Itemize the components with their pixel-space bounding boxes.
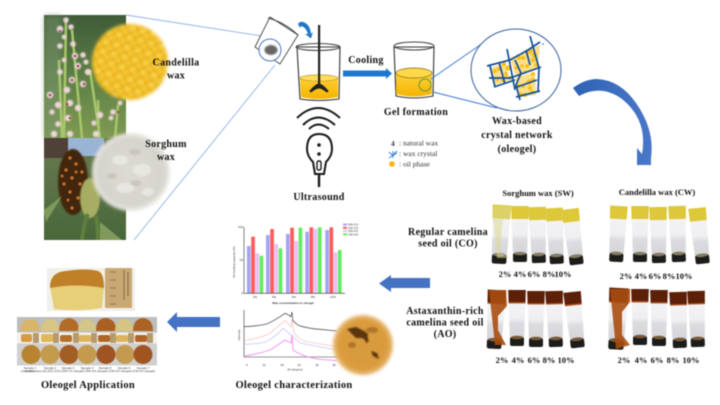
label: gel formation: Gel formation <box>384 107 448 118</box>
captions: cake samples: Sample 1 <box>24 366 37 370</box>
circle: wax-based crystal network <box>471 29 561 111</box>
label: astaxanthin-rich camelina seed oil: (AO) <box>434 329 456 340</box>
percent labels: candelilla astaxanthin: 4% <box>635 355 647 365</box>
percent labels: candelilla astaxanthin: 8% <box>667 355 679 365</box>
percent labels: candelilla astaxanthin: 10% <box>682 355 700 365</box>
percent labels: candelilla astaxanthin <box>618 355 700 365</box>
label: cooling: Cooling <box>348 55 384 66</box>
captions: cake samples: (butter) <box>25 369 35 373</box>
percent labels: candelilla regular: 8% <box>663 271 675 281</box>
heading: candelilla wax: Candelilla wax (CW) <box>619 187 695 197</box>
icon: gel formation beaker <box>394 42 434 98</box>
zoom guide lines from waxes to beaker <box>126 15 275 240</box>
line chart: XRD intensity: 24 <box>297 363 301 367</box>
bar chart: oil-holding capacity: CW-CO <box>348 226 359 230</box>
label: candelilla wax: wax <box>167 70 185 82</box>
percent labels: candelilla regular: 6% <box>649 271 661 281</box>
arrow: pour into beaker <box>298 22 313 38</box>
arrow: characterization to application <box>167 312 220 332</box>
percent labels: sorghum regular: 6% <box>528 269 540 279</box>
label: oleogel characterization: Oleogel characterization <box>235 380 353 391</box>
wax sample: candelilla pellets <box>92 24 168 100</box>
bar chart: oil-holding capacity: 100 <box>238 225 243 229</box>
captions: cake samples: (camelina seed oil) (AO) (CO) (SW-CO oleogel) (SW-AO oleogel) (CW-CO oleogel) (CW-AO oleogel) <box>21 369 155 373</box>
percent labels: sorghum regular <box>499 269 572 279</box>
label: candelilla wax: Candelilla <box>153 58 199 68</box>
captions: cake samples: Sample 6 <box>118 366 131 370</box>
percent labels: candelilla regular: 4% <box>635 271 647 281</box>
photo: baked cake with ruler <box>47 268 135 311</box>
label: sorghum wax: wax <box>157 152 175 163</box>
label: wax-based crystal network: Wax-based <box>492 116 542 127</box>
icon: tilted beaker with wax <box>255 17 298 64</box>
bar chart: oil-holding capacity: SW-CO <box>348 222 359 226</box>
label: sorghum wax: Sorghum <box>145 139 187 150</box>
tubes: candelilla wax in astaxanthin oil <box>606 287 707 350</box>
line chart: XRD intensity: 18 <box>280 363 284 367</box>
legend: natural wax, wax crystal, oil phase <box>389 138 438 168</box>
photo: candelilla plant <box>44 15 126 138</box>
legend: natural wax, wax crystal, oil phase: 4 <box>391 139 395 148</box>
tubes: sorghum wax in astaxanthin oil <box>485 290 587 349</box>
bar chart: oil-holding capacity: SW-AO <box>348 229 359 233</box>
line chart: XRD intensity: 36 <box>332 363 336 367</box>
percent labels: candelilla astaxanthin: 2% <box>618 355 630 365</box>
line chart: XRD intensity: 6 <box>246 363 248 367</box>
legend: natural wax, wax crystal, oil phase: : wax crystal <box>399 149 437 158</box>
bar chart: oil-holding capacity: 4% <box>272 295 276 299</box>
legend: natural wax, wax crystal, oil phase: : natural wax <box>399 138 438 148</box>
tubes: candelilla wax in regular oil <box>607 206 712 265</box>
percent labels: sorghum astaxanthin: 6% <box>528 355 540 365</box>
percent labels: sorghum regular: 2% <box>499 269 511 279</box>
label: oleogel application: Oleogel Application <box>41 380 135 391</box>
icon: ultrasound probe <box>297 108 340 187</box>
photo: oleogel micrograph <box>333 315 393 375</box>
line chart: XRD intensity: 12 <box>262 363 266 367</box>
bar chart: oil-holding capacity: Wax concentration in oleogel <box>272 301 314 305</box>
label: astaxanthin-rich camelina seed oil: camelina seed oil <box>406 318 484 328</box>
bar chart: oil-holding capacity: 8% <box>311 295 315 299</box>
captions: cake samples: Sample 7 <box>137 366 150 370</box>
label: wax-based crystal network: crystal network <box>481 130 553 141</box>
line chart: XRD intensity: 2θ (degree) <box>287 368 303 372</box>
percent labels: sorghum regular: 8% <box>543 269 555 279</box>
photo strip: cake cross-sections <box>17 317 157 332</box>
percent labels: sorghum astaxanthin <box>496 355 574 365</box>
percent labels: candelilla regular: 2% <box>620 271 632 281</box>
percent labels: sorghum astaxanthin: 8% <box>543 355 555 365</box>
line chart: XRD intensity <box>237 310 345 372</box>
captions: cake samples <box>21 366 155 373</box>
captions: cake samples: Sample 4 <box>81 366 94 370</box>
percent labels: sorghum astaxanthin: 2% <box>496 355 508 365</box>
photo strip: side views with ruler <box>17 332 157 344</box>
icon: main beaker with stirrer <box>296 25 340 100</box>
bar chart: oil-holding capacity: 0 <box>241 291 243 295</box>
percent labels: candelilla regular <box>620 271 692 281</box>
percent labels: sorghum regular: 10% <box>554 269 572 279</box>
captions: cake samples: Sample 2 <box>44 366 57 370</box>
label: regular camelina seed oil: seed oil (CO) <box>418 238 478 250</box>
bar chart: oil-holding capacity: 6% <box>292 295 296 299</box>
line chart: XRD intensity: 30 <box>315 363 319 367</box>
captions: cake samples: Sample 3 <box>62 366 75 370</box>
percent labels: candelilla astaxanthin: 6% <box>651 355 663 365</box>
line chart: XRD intensity: Intensity <box>237 329 241 341</box>
tubes: sorghum wax in regular oil <box>490 205 586 266</box>
label: regular camelina seed oil: Regular camelina <box>408 227 488 238</box>
zoom lines from gel to network <box>431 43 497 108</box>
legend: natural wax, wax crystal, oil phase: : oil phase <box>399 160 430 168</box>
percent labels: sorghum astaxanthin: 4% <box>512 355 524 365</box>
label: ultrasound: Ultrasound <box>293 192 345 203</box>
heading: sorghum wax: Sorghum wax (SW) <box>502 188 574 198</box>
arrow: samples to characterization <box>379 275 430 292</box>
label: astaxanthin-rich camelina seed oil: Astaxanthin-rich <box>406 306 484 317</box>
photo: sorghum plant <box>44 138 126 240</box>
percent labels: candelilla regular: 10% <box>676 271 692 281</box>
bar chart: oil-holding capacity: 10% <box>330 295 336 299</box>
bar chart: oil-holding capacity: 50 <box>240 258 243 262</box>
wax sample: sorghum powder <box>92 133 170 211</box>
bar chart: oil-holding capacity <box>232 222 359 305</box>
bar chart: oil-holding capacity: 2% <box>253 295 257 299</box>
arrow: curved to samples <box>573 79 652 165</box>
captions: cake samples: Sample 5 <box>99 366 112 370</box>
bar chart: oil-holding capacity: CW-AO <box>348 232 359 236</box>
photo strip: cake top views <box>17 344 157 366</box>
percent labels: sorghum astaxanthin: 10% <box>558 355 574 365</box>
percent labels: sorghum regular: 4% <box>514 269 526 279</box>
label: wax-based crystal network: (oleogel) <box>498 144 536 155</box>
arrow: cooling <box>343 68 392 79</box>
bar chart: oil-holding capacity: Oil-holding capacity (%) <box>232 246 236 278</box>
